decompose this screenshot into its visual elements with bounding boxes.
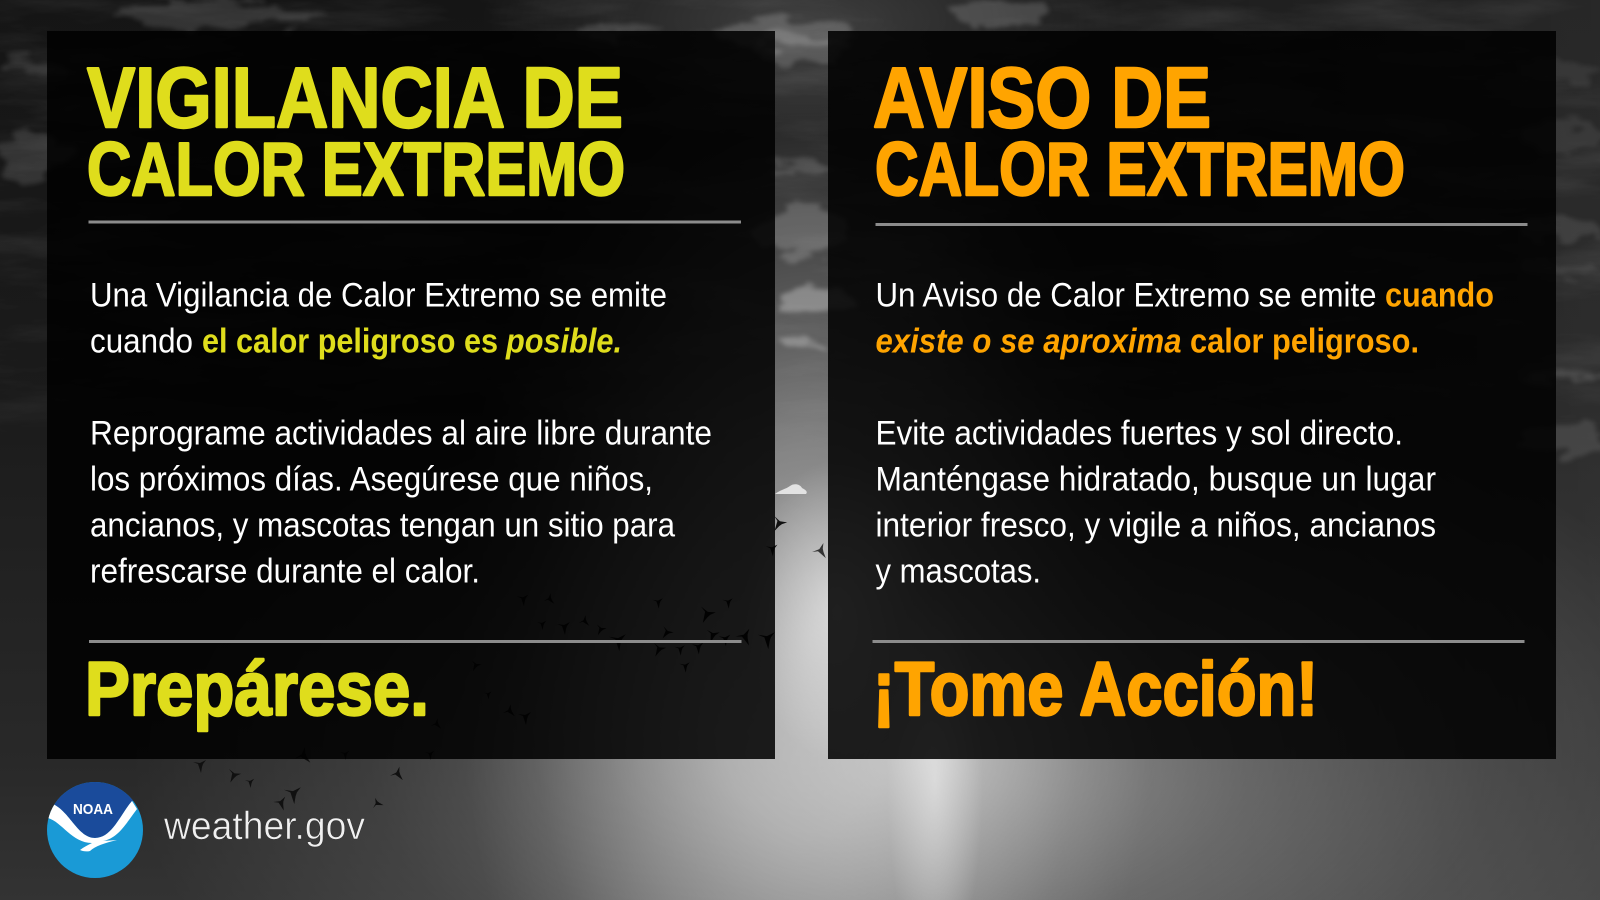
text: warning advice: y mascotas.	[876, 552, 1041, 590]
text: definition of the watch: cuando	[90, 322, 193, 360]
icon: NOAA logo: NOAA	[73, 801, 113, 818]
text: definition of the warning	[876, 276, 1494, 360]
background: cloud layer	[0, 0, 1600, 494]
text: watch advice	[90, 414, 712, 590]
text: definition of the warning: calor peligroso.	[1190, 322, 1419, 360]
text: warning advice: Manténgase hidratado, busque un lugar	[876, 460, 1436, 498]
text: definition of the warning: existe o se aproxima	[876, 322, 1182, 360]
heading: Vigilancia de Calor Extremo: VIGILANCIA DE	[87, 51, 623, 146]
heading: Aviso de Calor Extremo	[873, 51, 1405, 211]
background: flock of birds	[193, 514, 831, 813]
call to action: Tome Acción: ¡Tome Acción!	[873, 647, 1318, 732]
text: watch advice: los próximos días. Asegúrese que niños,	[90, 460, 653, 498]
panel: Aviso de Calor Extremo	[828, 31, 1556, 759]
text: warning advice	[876, 414, 1436, 590]
text: definition of the watch: posible.	[505, 322, 622, 360]
text: definition of the watch: Una Vigilancia de Calor Extremo se emite	[90, 276, 667, 314]
text: definition of the warning: Un Aviso de Calor Extremo se emite	[876, 276, 1376, 314]
text: warning advice: Evite actividades fuertes y sol directo.	[876, 414, 1403, 452]
heading: Aviso de Calor Extremo: AVISO DE	[873, 51, 1211, 146]
heading: Vigilancia de Calor Extremo	[87, 51, 625, 211]
text: watch advice: refrescarse durante el calor.	[90, 552, 480, 590]
heading: Aviso de Calor Extremo: CALOR EXTREMO	[875, 127, 1405, 211]
text: warning advice: interior fresco, y vigile a niños, ancianos	[876, 506, 1436, 544]
text: website: weather.gov	[163, 805, 365, 848]
heading: Vigilancia de Calor Extremo: CALOR EXTREMO	[87, 127, 625, 211]
text: watch advice: Reprograme actividades al aire libre durante	[90, 414, 712, 452]
text: definition of the watch: el calor peligroso es	[202, 322, 498, 360]
call to action: Prepárese: Prepárese.	[85, 647, 429, 732]
panel: Vigilancia de Calor Extremo	[47, 31, 775, 759]
icon: NOAA logo	[47, 782, 143, 878]
text: definition of the warning: cuando	[1385, 276, 1494, 314]
text: definition of the watch	[90, 276, 667, 360]
text: watch advice: ancianos, y mascotas tengan un sitio para	[90, 506, 675, 544]
